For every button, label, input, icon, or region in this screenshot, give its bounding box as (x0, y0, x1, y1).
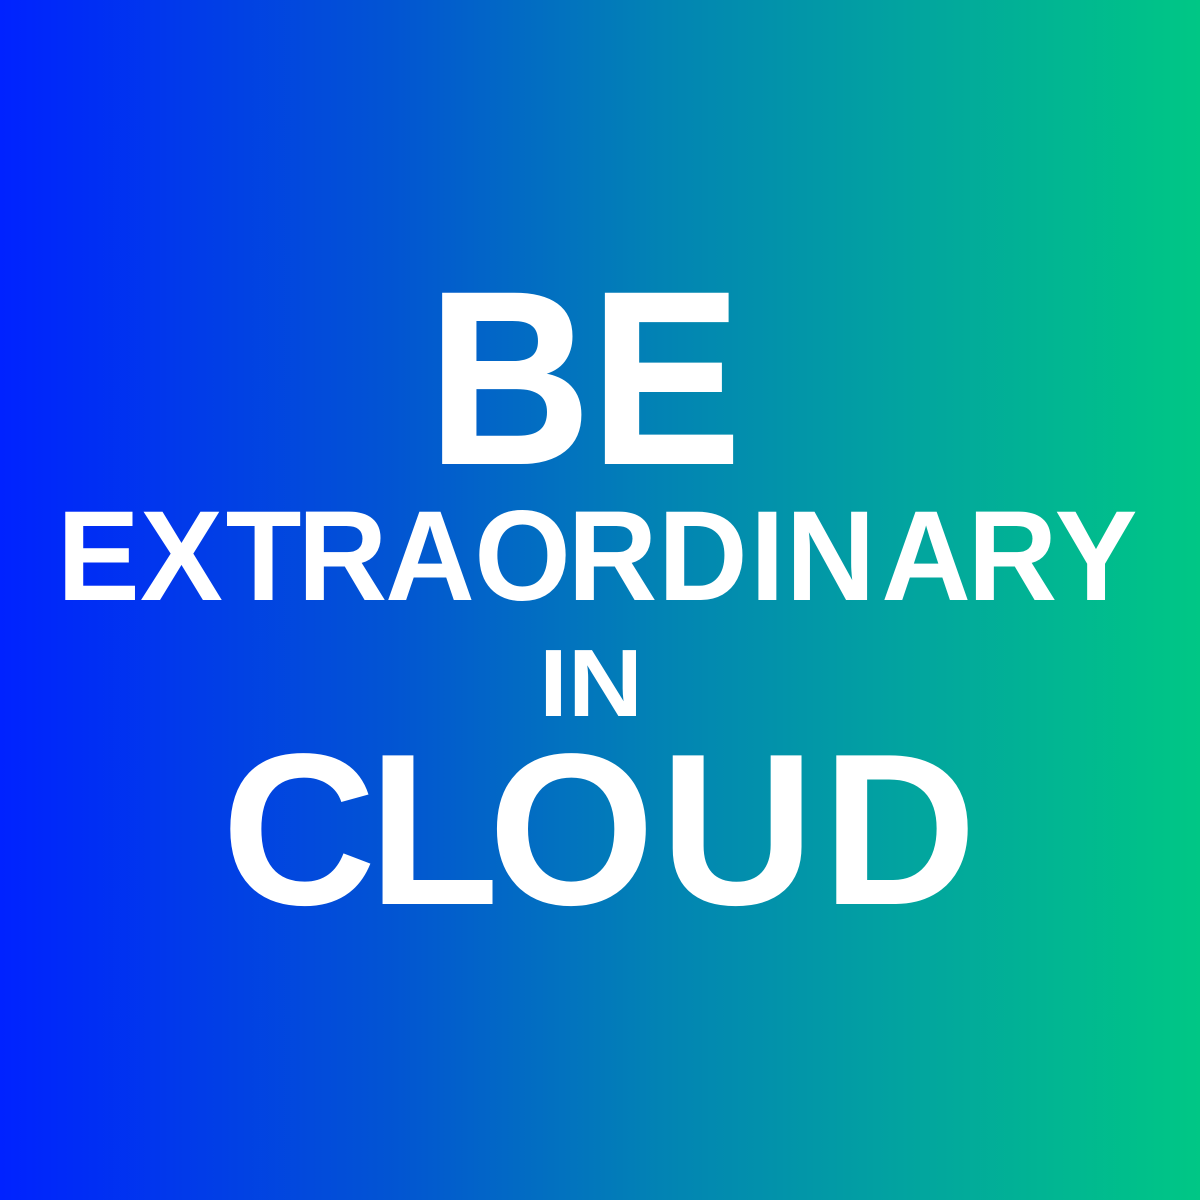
headline word: BE: BE (428, 241, 741, 516)
headline (57, 241, 1137, 950)
headline word: EXTRAORDINARY: EXTRAORDINARY (57, 484, 1137, 627)
headline word: IN: IN (539, 630, 643, 737)
headline word: CLOUD: CLOUD (222, 708, 977, 950)
